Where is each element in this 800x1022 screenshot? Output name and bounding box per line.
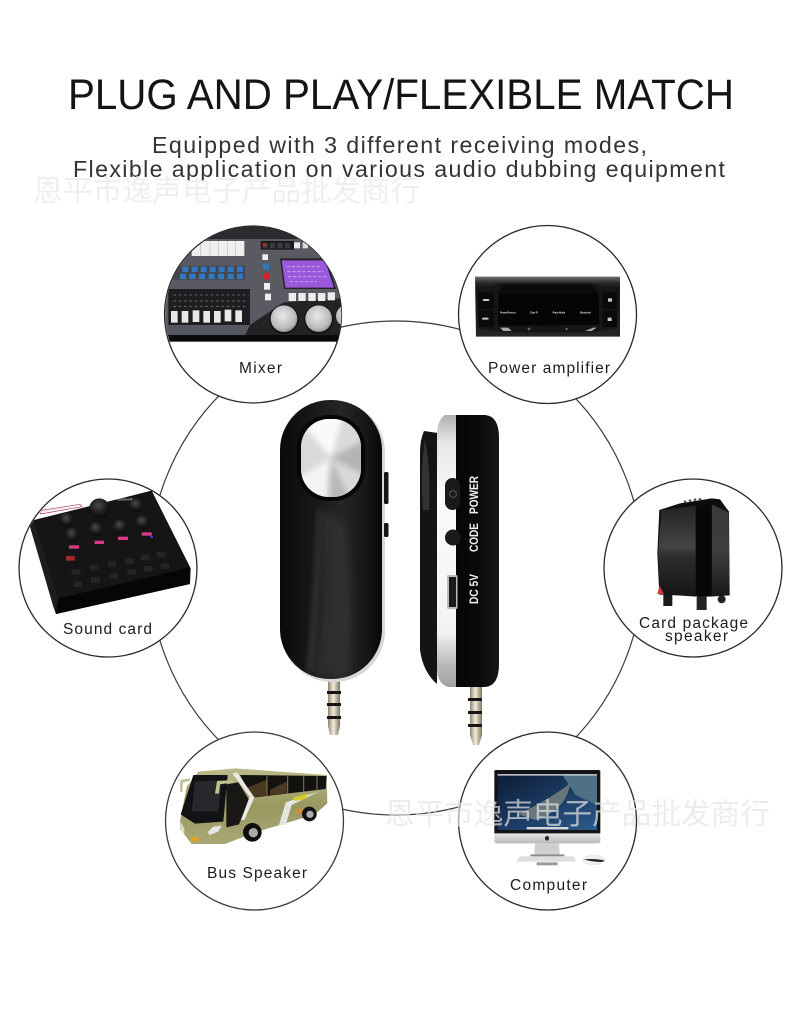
side labels xyxy=(469,475,481,604)
side labels: CODE xyxy=(469,523,481,552)
power amplifier label: Power amplifier xyxy=(488,360,610,377)
crease highlight xyxy=(307,507,352,676)
amplifier image: Bluetooth xyxy=(580,312,591,315)
panel: sound card xyxy=(19,479,197,657)
mixer image xyxy=(165,226,342,342)
subtitle xyxy=(73,132,726,182)
subtitle: Flexible application on various audio dubbing equipment xyxy=(73,156,726,182)
sound card image: Bluetooth xyxy=(117,498,133,502)
computer label: Computer xyxy=(510,877,587,894)
watermark top: 恩平市逸声电子产品批发商行 xyxy=(33,175,420,208)
panel: mixer xyxy=(164,225,342,404)
connector ring xyxy=(149,321,643,815)
amplifier image: Clari-Fi xyxy=(530,313,538,315)
jack plug front xyxy=(327,680,341,735)
speaker label: speaker xyxy=(665,628,728,645)
subtitle: Equipped with 3 different receiving modes, xyxy=(152,132,647,158)
title: PLUG AND PLAY/FLEXIBLE MATCH xyxy=(68,71,734,119)
amplifier image xyxy=(475,277,620,337)
speaker label: Card package xyxy=(639,615,748,632)
jack plug side xyxy=(468,685,482,745)
side buttons xyxy=(384,472,388,537)
code button xyxy=(445,530,461,546)
bus label: Bus Speaker xyxy=(207,865,307,882)
sound card image xyxy=(30,491,191,614)
watermark bottom: 恩平市逸声电子产品批发商行 xyxy=(385,798,770,831)
speaker label xyxy=(639,615,748,645)
panel: computer xyxy=(458,732,636,910)
device: side view xyxy=(420,415,499,745)
usb port xyxy=(447,575,458,609)
computer image xyxy=(494,770,605,865)
amplifier image: Party Mode xyxy=(553,312,566,315)
device: front view xyxy=(280,400,388,735)
mixer label: Mixer xyxy=(239,360,282,377)
sound card image: MODULE LIVE SOUND CARD xyxy=(41,506,74,513)
power button xyxy=(445,478,460,510)
amplifier image: Power/Protect xyxy=(500,312,516,315)
silver oval button xyxy=(297,415,365,501)
panel: power amplifier xyxy=(458,226,636,404)
side labels: DC 5V xyxy=(469,574,481,604)
panel: card package speaker xyxy=(604,479,782,657)
speaker image xyxy=(657,498,730,610)
panel: bus speaker xyxy=(166,732,344,910)
bus image xyxy=(180,768,327,844)
sound card label: Sound card xyxy=(63,621,152,638)
side labels: POWER xyxy=(469,475,481,514)
